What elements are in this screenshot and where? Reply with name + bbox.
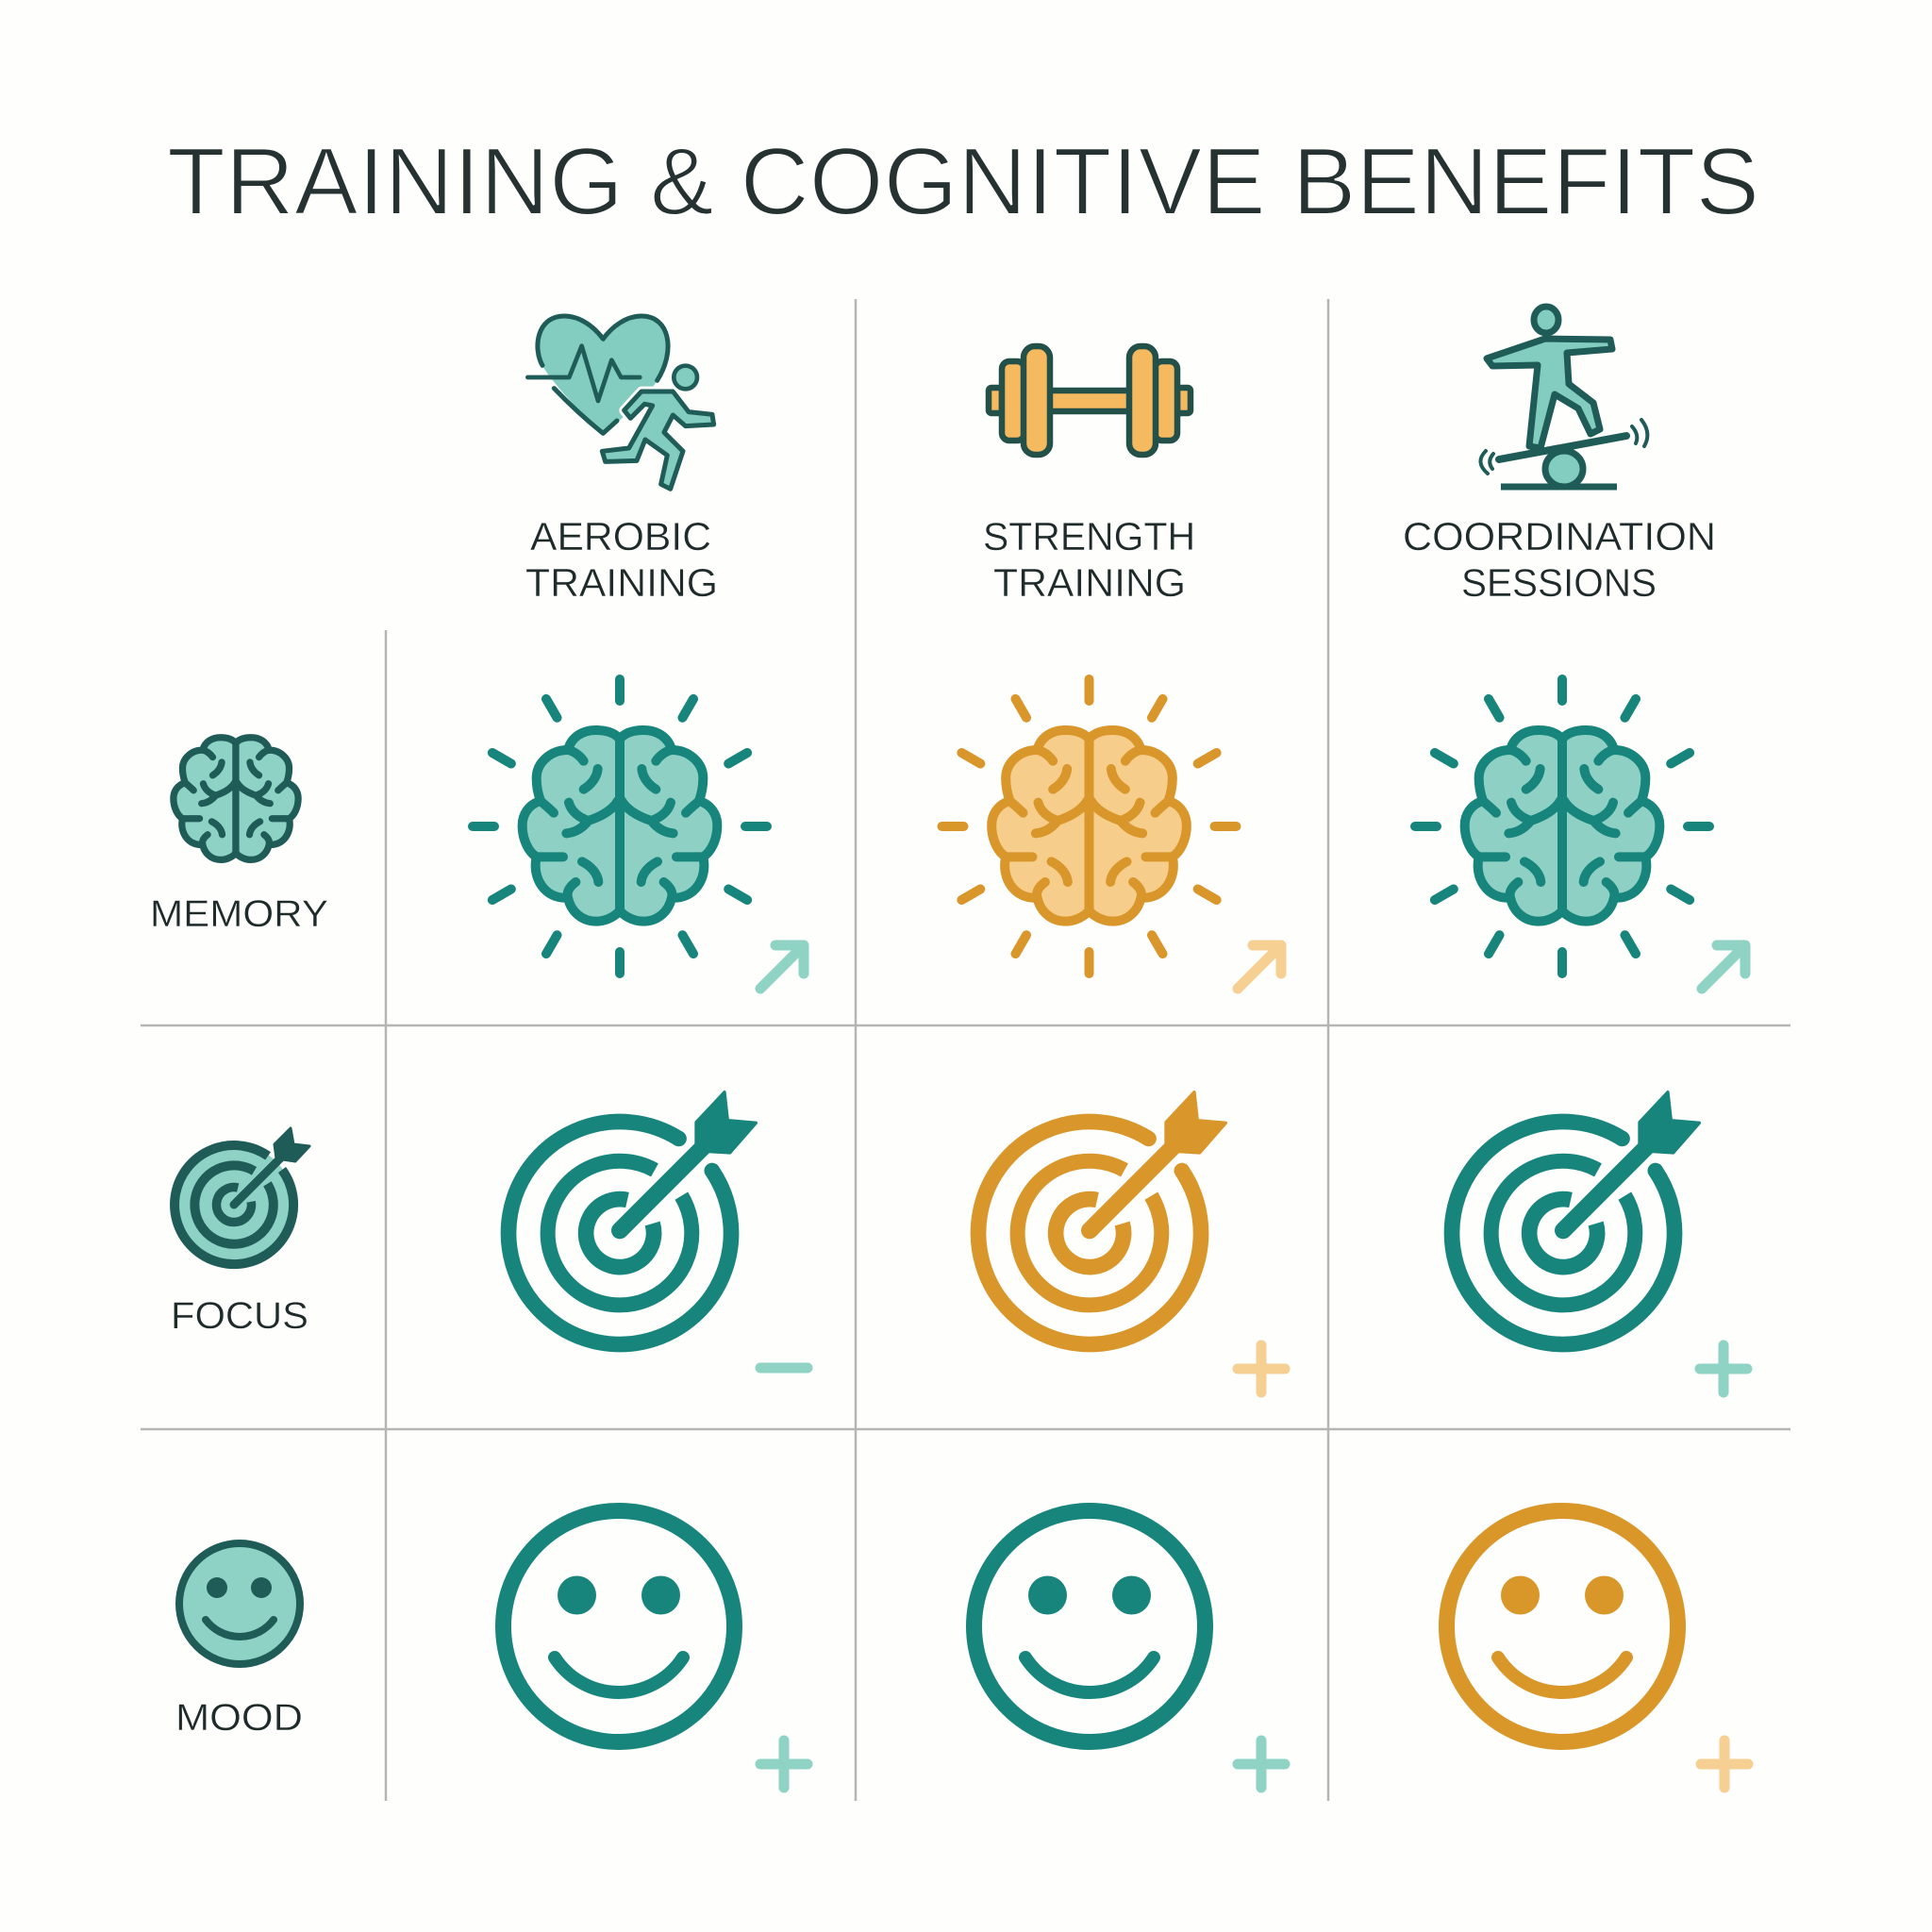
icon: brain small bbox=[174, 738, 298, 859]
icon: teal brain with rays bbox=[473, 679, 767, 974]
title: TRAINING & COGNITIVE BENEFITS bbox=[167, 129, 1759, 235]
indicator: plus bbox=[1238, 1345, 1285, 1392]
label: aerobic training: AEROBIC bbox=[530, 514, 711, 558]
indicator: arrow up bbox=[1702, 945, 1745, 989]
cell: memory x strength bbox=[941, 679, 1281, 989]
label: coordination sessions: COORDINATION bbox=[1403, 514, 1716, 558]
icon: orange brain with rays bbox=[941, 679, 1236, 974]
icon: orange smile bbox=[1447, 1511, 1677, 1741]
cell: memory x aerobic bbox=[473, 679, 804, 989]
cell: focus x strength bbox=[978, 1092, 1285, 1392]
icon: teal target bbox=[1452, 1092, 1699, 1344]
row header: mood bbox=[175, 1543, 303, 1739]
indicator: plus bbox=[1700, 1345, 1747, 1392]
column header: strength training bbox=[983, 346, 1195, 605]
cell: focus x coordination bbox=[1452, 1092, 1747, 1392]
cell: mood x strength bbox=[974, 1511, 1285, 1788]
cell: mood x aerobic bbox=[504, 1511, 808, 1788]
indicator: plus bbox=[760, 1740, 808, 1788]
indicator: plus bbox=[1701, 1740, 1748, 1788]
indicator: plus bbox=[1238, 1740, 1285, 1788]
cell: mood x coordination bbox=[1447, 1511, 1748, 1788]
label: strength training bbox=[983, 514, 1195, 605]
indicator: minus bbox=[760, 1362, 808, 1374]
label: strength training: STRENGTH bbox=[983, 514, 1195, 558]
icon: teal smile bbox=[504, 1511, 734, 1741]
label: mood: MOOD bbox=[175, 1697, 303, 1739]
cell: focus x aerobic bbox=[508, 1092, 808, 1368]
label: memory: MEMORY bbox=[150, 893, 328, 935]
icon: dumbbell bbox=[989, 346, 1191, 455]
cell: memory x coordination bbox=[1415, 679, 1745, 989]
indicator: arrow up bbox=[1238, 945, 1281, 989]
icon: smile small bbox=[179, 1543, 300, 1664]
label: aerobic training: TRAINING bbox=[525, 560, 718, 605]
icon: balancing figure bbox=[1480, 307, 1647, 487]
label: focus: FOCUS bbox=[171, 1295, 308, 1337]
icon: orange target bbox=[978, 1092, 1225, 1344]
icon: teal smile bbox=[974, 1511, 1206, 1741]
label: strength training: TRAINING bbox=[993, 560, 1186, 605]
row header: focus bbox=[171, 1128, 309, 1337]
label: coordination sessions bbox=[1403, 514, 1716, 605]
label: aerobic training bbox=[525, 514, 718, 605]
row header: memory bbox=[150, 738, 328, 935]
column header: aerobic training bbox=[525, 316, 718, 605]
indicator: arrow up bbox=[760, 945, 804, 989]
icon: target small bbox=[174, 1128, 309, 1265]
icon: teal target bbox=[508, 1092, 756, 1344]
icon: teal brain with rays bbox=[1415, 679, 1709, 974]
label: coordination sessions: SESSIONS bbox=[1461, 560, 1657, 605]
column header: coordination sessions bbox=[1403, 307, 1716, 605]
icon: heart with runner bbox=[527, 316, 714, 489]
